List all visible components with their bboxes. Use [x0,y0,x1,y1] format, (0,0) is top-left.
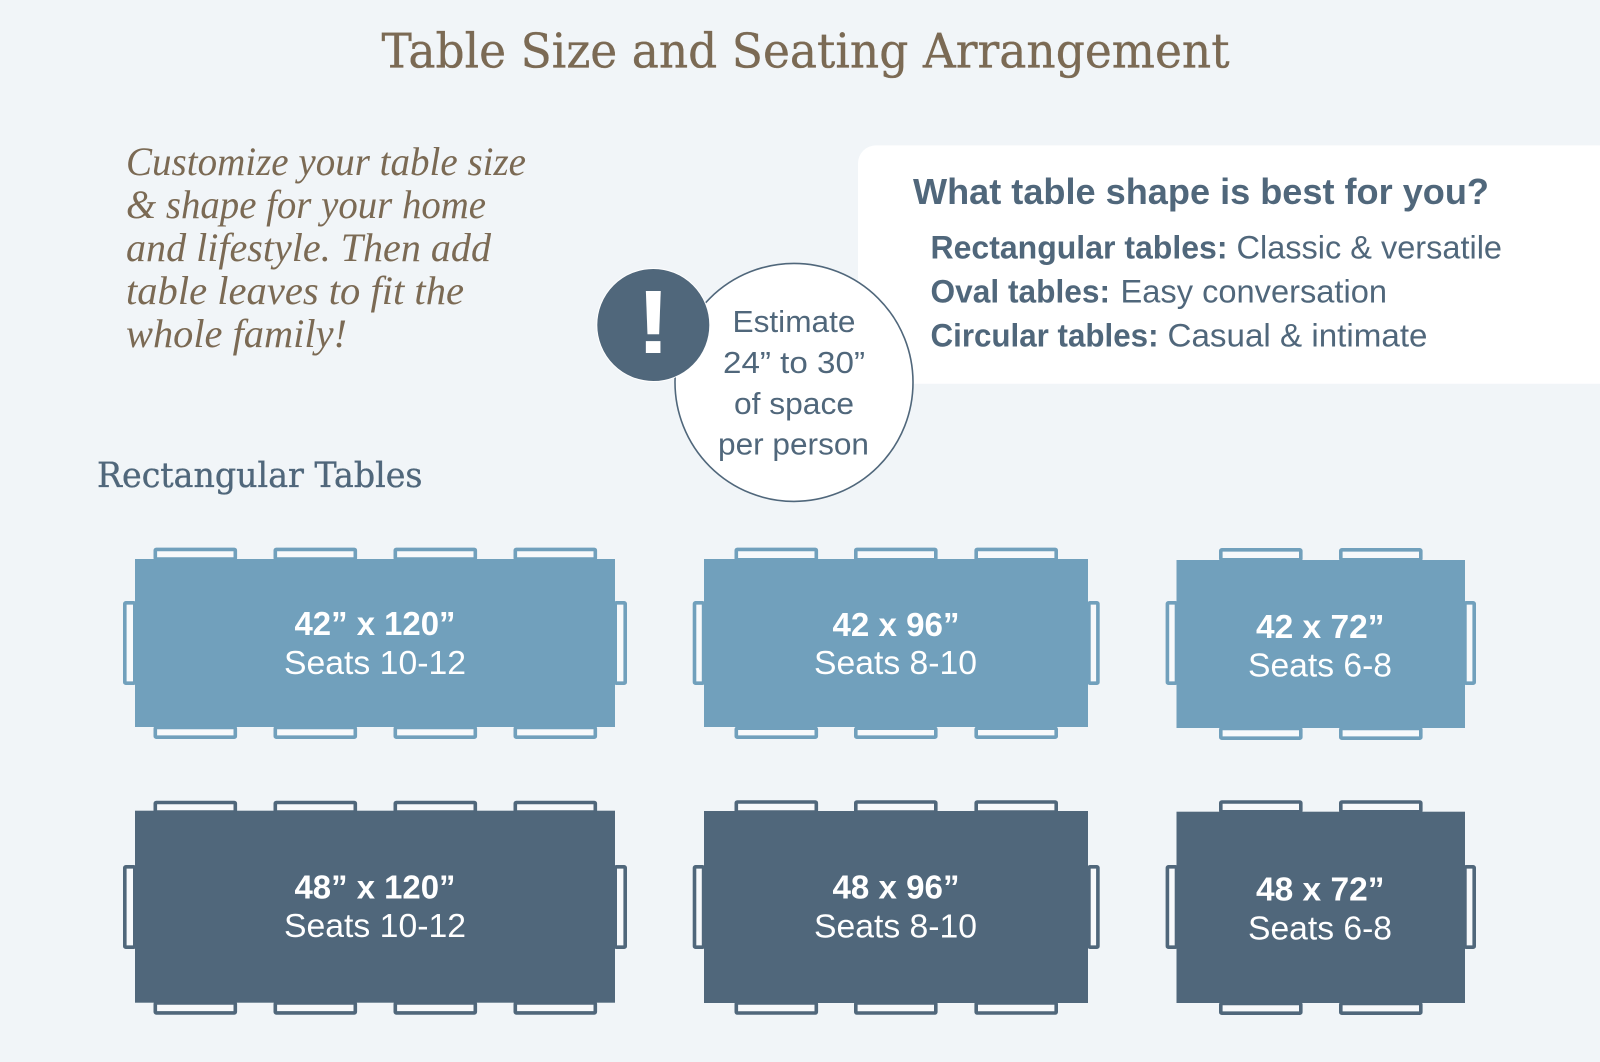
panel: what table shape is best [858,145,1600,384]
label: 42 x 120: 42” x 120” [294,605,456,642]
callout: space per person [597,263,913,501]
label: 42 x 72: Seats 6-8 [1248,646,1392,684]
label: 48 x 120: 48” x 120” [294,869,456,906]
list item: rectangular tables: Rectangular tables: [930,230,1228,266]
label: 48 x 96 [814,869,977,944]
callout text: Estimate [732,304,856,339]
table: 48 x 120 [125,802,625,1013]
label: 42 x 120: Seats 10-12 [284,644,466,681]
section heading: Rectangular Tables [97,456,422,496]
label: 42 x 120 [284,605,466,681]
intro text block: and lifestyle. Then add [126,225,492,270]
intro text block: Customize your table size [126,139,526,184]
callout text [718,304,869,462]
intro text block: whole family! [126,311,347,356]
label: 42 x 96 [814,606,977,681]
list item: circular tables [930,318,1428,354]
intro text block [126,139,526,356]
intro text block: table leaves to fit the [126,268,464,313]
intro text block: & shape for your home [126,182,486,227]
list item: rectangular tables [930,230,1502,266]
callout text: of space [734,386,854,421]
list item: circular tables: Circular tables: [930,318,1158,354]
label: 48 x 96: 48 x 96” [832,869,960,906]
callout text: per person [718,426,869,462]
label: 48 x 120: Seats 10-12 [284,907,466,944]
table: 48 x 72 [1167,802,1474,1013]
list item: oval tables: Oval tables: [930,274,1110,310]
panel heading: What table shape is best for you? [913,171,1489,212]
table: 42 x 72 [1167,550,1474,738]
label: 48 x 72: Seats 6-8 [1248,910,1392,946]
list item: oval tables: Easy conversation [1120,274,1387,310]
label: 48 x 72 [1248,871,1392,946]
label: 48 x 72: 48 x 72” [1256,871,1384,908]
callout text: 24” to 30” [723,345,865,380]
label: 48 x 96: Seats 8-10 [814,908,977,944]
label: 42 x 96: Seats 8-10 [814,644,977,681]
icon: exclamation badge [597,268,710,382]
label: 42 x 72 [1248,608,1392,684]
list item: rectangular tables: Classic & versatile [1236,230,1502,266]
list item: circular tables: Casual & intimate [1168,318,1428,354]
icon: exclamation badge: ! [636,271,671,372]
table: 42 x 120 [125,549,625,737]
label: 42 x 72: 42 x 72” [1256,608,1384,645]
table: 42 x 96 [694,549,1098,737]
table: 48 x 96 [694,802,1098,1013]
title: Table Size and Seating Arrangement [382,24,1230,80]
label: 42 x 96: 42 x 96” [832,606,960,643]
list item: oval tables [930,274,1387,310]
label: 48 x 120 [284,869,466,944]
